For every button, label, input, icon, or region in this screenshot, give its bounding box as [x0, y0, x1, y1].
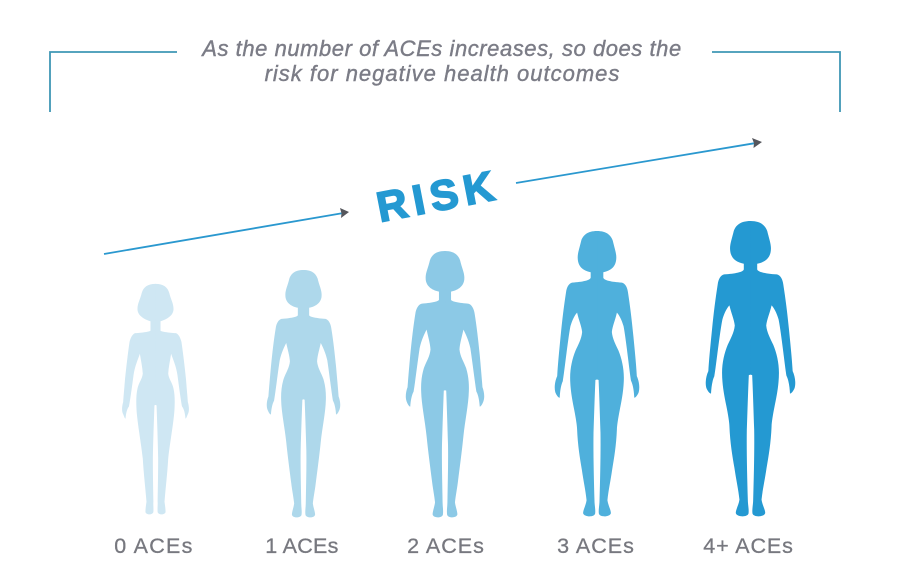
arrow: rising risk, left segment [104, 208, 349, 254]
heading bracket: right [712, 52, 840, 112]
label: 3 ACEs: 3 ACEs [557, 534, 635, 558]
label: 2 ACEs: 2 ACEs [407, 534, 485, 558]
figure: 3 ACEs [555, 231, 639, 516]
figure: 4+ ACEs [706, 221, 795, 516]
figure: 0 ACEs [122, 284, 189, 514]
figure: 1 ACEs [267, 270, 340, 517]
heading bracket: left [50, 52, 177, 112]
label: 1 ACEs: 1 ACEs [265, 534, 339, 558]
heading text: As the number of ACEs increases, so does the [200, 36, 682, 61]
heading text: risk for negative health outcomes [265, 61, 620, 86]
label: 4+ ACEs: 4+ ACEs [703, 534, 794, 558]
arrow: rising risk, right segment [516, 138, 762, 183]
risk label: RISK [373, 161, 504, 231]
label: 0 ACEs: 0 ACEs [114, 534, 194, 558]
figure: 2 ACEs [406, 251, 484, 517]
